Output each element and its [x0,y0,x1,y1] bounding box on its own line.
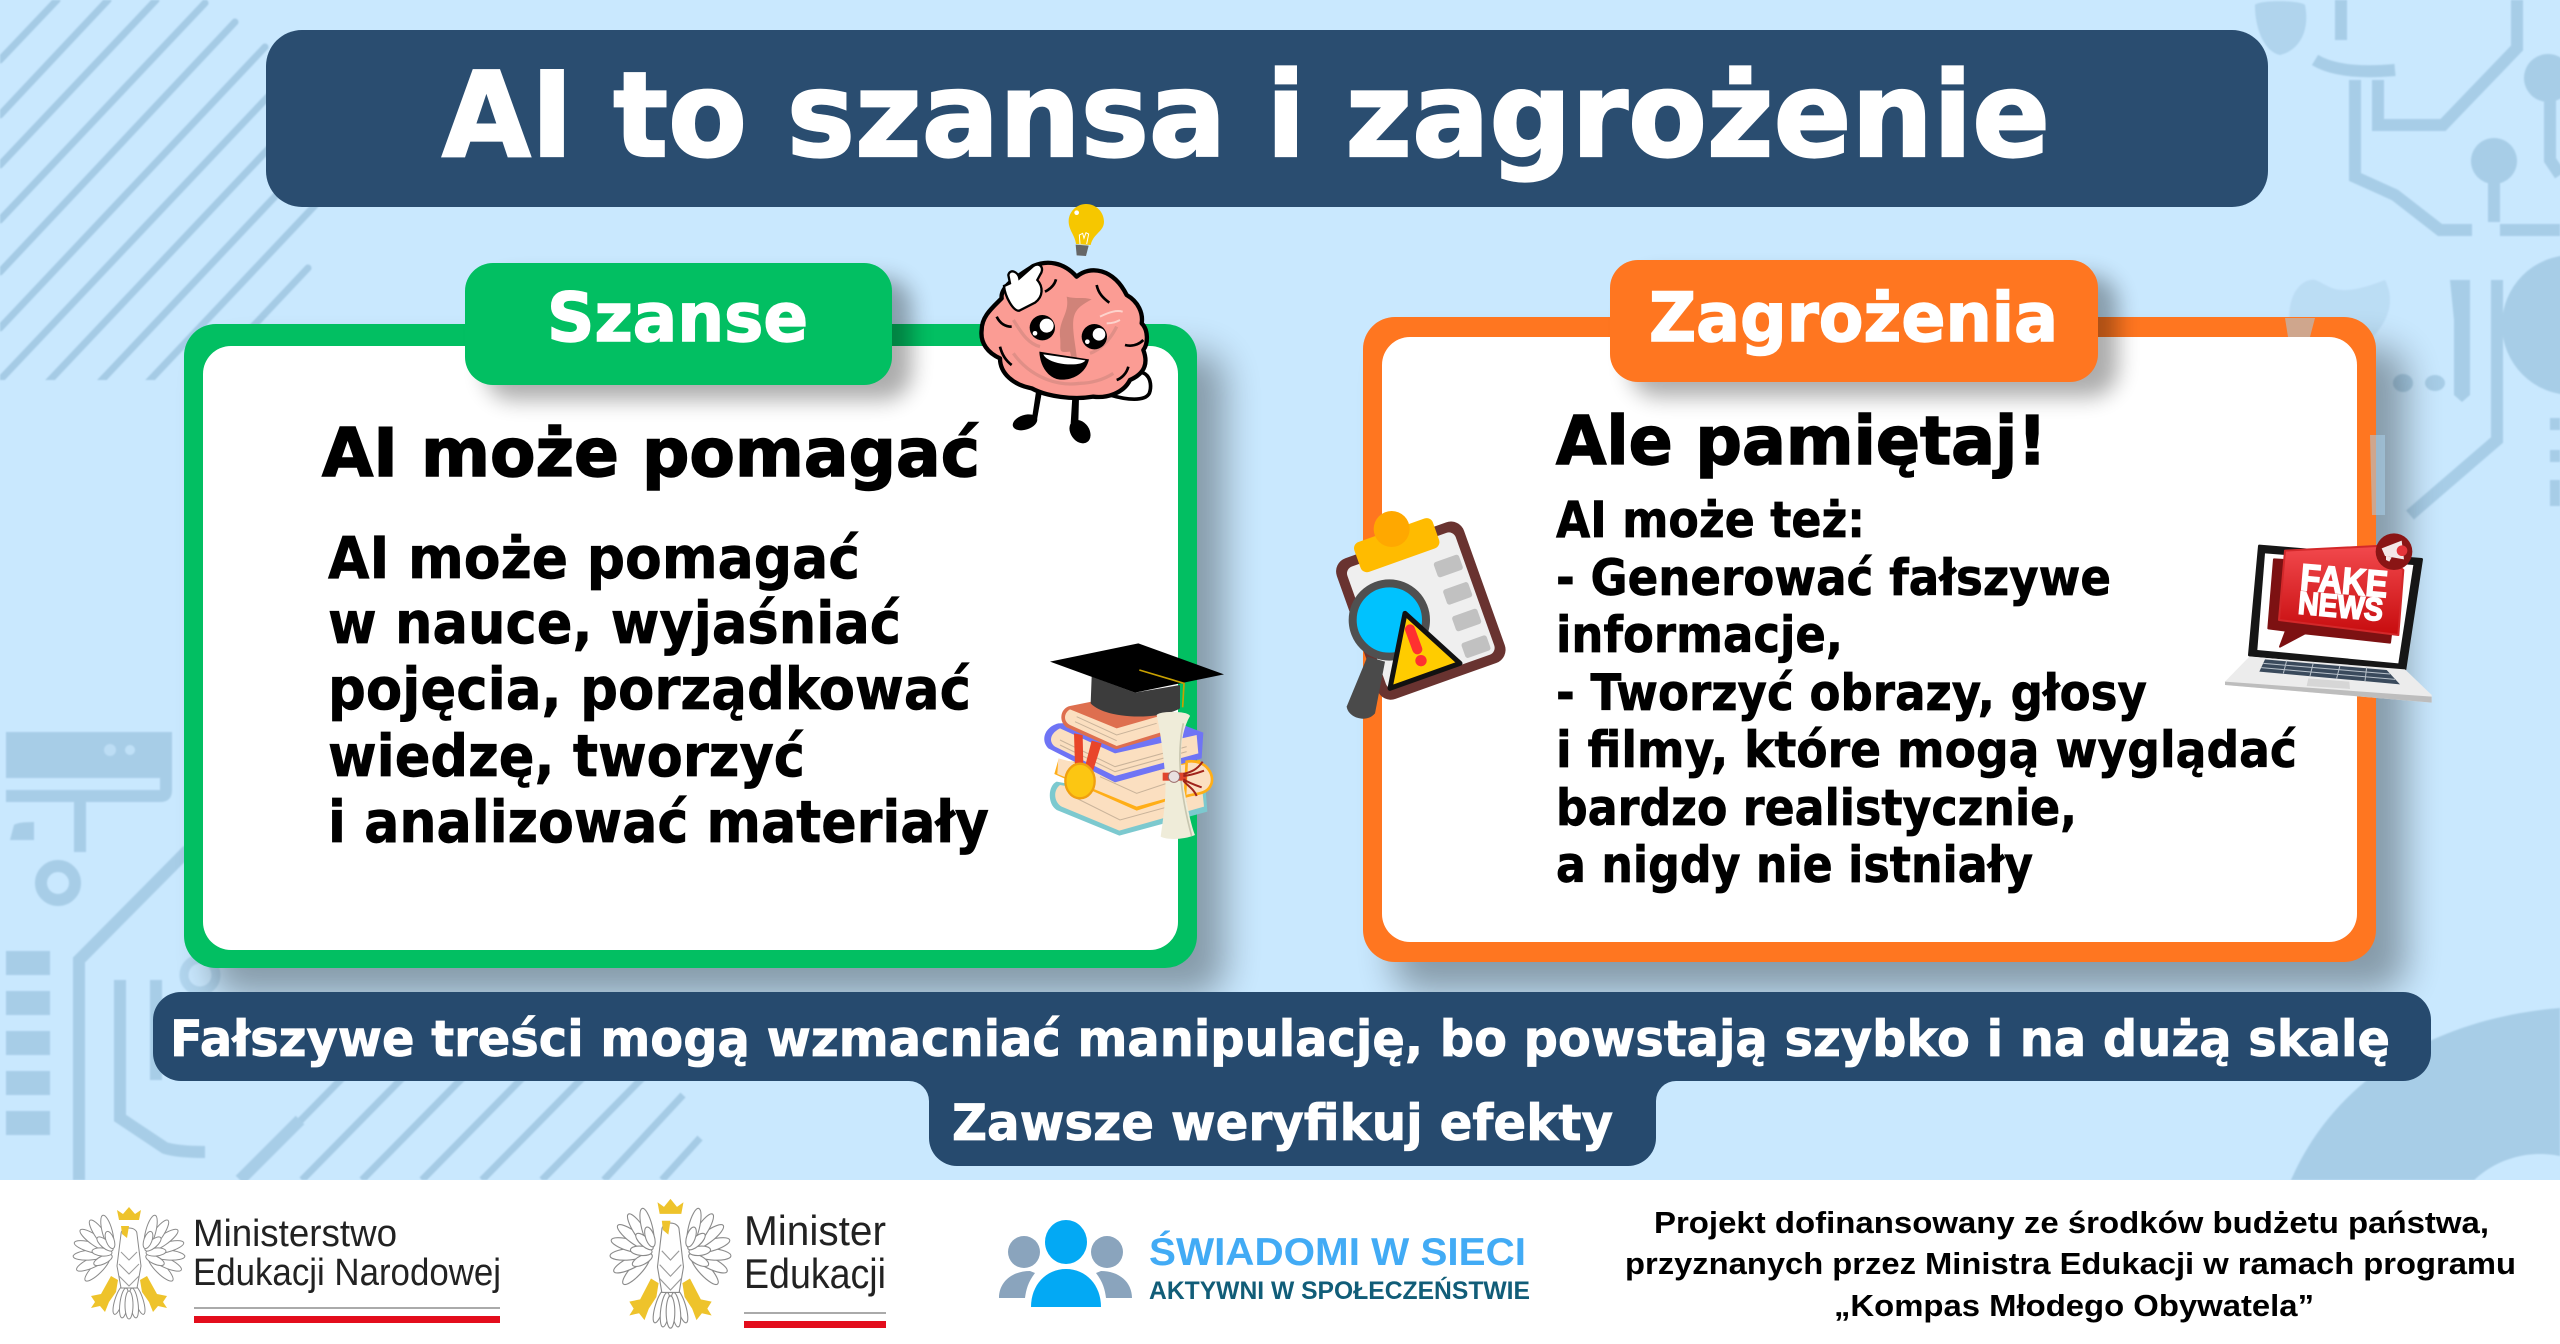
icon: books with graduation cap and diploma [1044,643,1224,839]
Zagrożenia body text: informacje, [1556,606,1843,664]
diploma scroll [1157,712,1212,839]
callout: verify: Zawsze weryfikuj efekty [952,1094,1613,1152]
Zagrożenia body text [1556,491,2297,894]
icon: laptop with fake news bubble [2225,533,2432,703]
callout bars [153,992,2431,1166]
Szanse body text: pojęcia, porządkować [328,655,971,723]
Zagrożenia pill [1610,260,2098,382]
Zagrożenia body text: - Generować fałszywe [1556,549,2111,607]
brain face [1030,315,1107,380]
icon: clipboard with magnifier and warning triangle [1332,511,1509,719]
logo: Minister Edukacji [610,1199,886,1328]
logo tagline: AKTYWNI W SPOŁECZEŃSTWIE [1149,1276,1530,1305]
Szanse pill: Szanse [547,279,808,358]
brain arm [1110,372,1151,399]
minister name: Edukacji [744,1250,886,1297]
funding note: „Kompas Młodego Obywatela” [1834,1288,2314,1323]
brain legs [1011,392,1095,447]
logo: Świadomi w sieci [999,1220,1530,1307]
clipboard [1332,511,1509,704]
icon: light bulb [1069,204,1104,256]
brain pointing hand [1004,265,1042,311]
icon: eagle emblem [73,1207,185,1319]
laptop [2225,546,2432,703]
Szanse heading: AI może pomagać [322,414,980,492]
funding note: przyznanych przez Ministra Edukacji w ramach programu [1625,1246,2516,1281]
second book [1044,720,1203,782]
Zagrożenia body text: - Tworzyć obrazy, głosy [1556,664,2147,722]
Zagrożenia body text: bardzo realistycznie, [1556,779,2077,837]
Zagrożenia body text: AI może też: [1556,491,1865,549]
Szanse body text: AI może pomagać [328,524,860,592]
icon: eagle emblem [610,1199,731,1328]
megaphone badge [2376,533,2412,570]
funding note [1625,1205,2516,1323]
Szanse pill shadow [485,278,912,400]
panel: Zagrożenia (threats) [1363,260,2406,992]
medal [1065,733,1102,798]
top book [1061,702,1180,749]
logo: Ministerstwo Edukacji Narodowej [73,1207,501,1323]
Szanse body text: wiedzę, tworzyć [328,722,805,790]
Szanse body text [328,524,989,856]
Zagrożenia body text: i filmy, które mogą wyglądać [1556,721,2297,779]
callout: manipulation warning: Fałszywe treści mogą wzmacniać manipulację, bo powstają szybko i na dużą skalę [170,1010,2390,1068]
Szanse body text: w nauce, wyjaśniać [328,589,901,657]
minister name [744,1207,886,1297]
fake news label: NEWS [2297,585,2385,628]
third book [1054,758,1202,811]
magnifier [1347,583,1426,719]
ministry name [193,1213,501,1294]
funding note: Projekt dofinansowany ze środków budżetu państwa, [1654,1205,2489,1240]
Zagrożenia heading: Ale pamiętaj! [1556,402,2047,480]
bottom book [1050,780,1207,836]
fake news label: FAKE [2299,556,2389,605]
Zagrożenia pill shadow [1630,275,2118,397]
minister name: Minister [744,1207,886,1254]
Szanse pill [465,263,892,385]
footer strip [0,1180,2560,1344]
Zagrożenia body text: a nigdy nie istniały [1556,836,2033,894]
ministry name: Edukacji Narodowej [193,1252,501,1294]
title text: AI to szansa i zagrożenie [442,46,2050,184]
brain body [981,263,1147,398]
panel: Szanse (opportunities) [184,263,1225,996]
icon: people group [999,1220,1132,1307]
logo wordmark: ŚWIADOMI W SIECI [1149,1230,1526,1274]
fake news label [2297,556,2389,628]
title bar [266,30,2268,207]
Zagrożenia pill: Zagrożenia [1649,279,2058,358]
speech bubble [2268,546,2403,647]
warning triangle [1390,613,1460,688]
graduation cap [1050,643,1224,717]
icon: brain mascot with light bulb [981,204,1151,447]
page lines [1060,717,1187,820]
ministry name: Ministerstwo [193,1213,397,1255]
overlay ghost marks [2285,318,2385,515]
Szanse body text: i analizować materiały [328,788,989,856]
